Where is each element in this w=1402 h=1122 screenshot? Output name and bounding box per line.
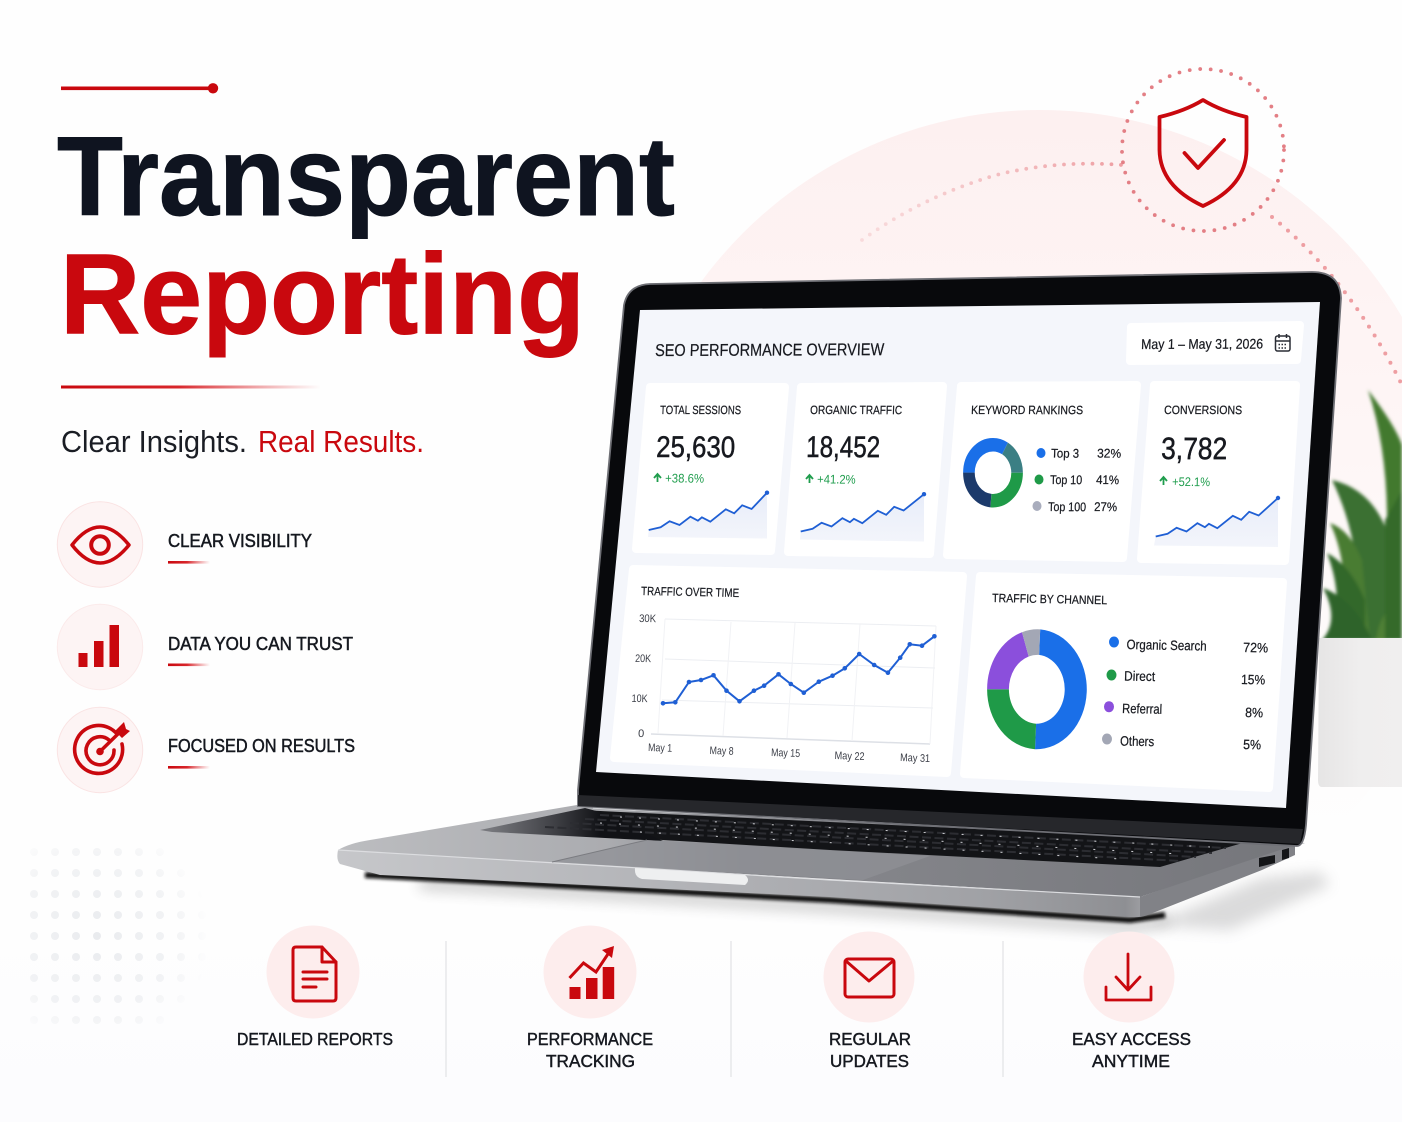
legend: keyword rankings [1032, 447, 1121, 514]
laptop [337, 272, 1341, 930]
bottom feature: performance tracking [527, 926, 653, 1071]
bottom feature: detailed reports: DETAILED REPORTS [237, 1029, 393, 1049]
dashboard title: SEO PERFORMANCE OVERVIEW [655, 340, 884, 360]
card: keyword rankings [947, 385, 1137, 558]
donut chart: traffic by channel [987, 629, 1087, 749]
card: organic traffic [788, 386, 943, 554]
card: organic traffic: ORGANIC TRAFFIC [810, 403, 903, 417]
legend: traffic by channel [1102, 636, 1268, 752]
legend: traffic by channel: Direct [1124, 669, 1156, 684]
icon: bar chart [78, 625, 119, 667]
line chart: May 8 [709, 745, 734, 758]
card: total sessions: TOTAL SESSIONS [660, 403, 741, 417]
card: conversions: CONVERSIONS [1164, 403, 1242, 417]
icon: target [75, 722, 130, 773]
legend: traffic by channel: 5% [1243, 737, 1261, 752]
bottom feature: easy access anytime: EASY ACCESS [1072, 1029, 1191, 1049]
icon: document [293, 947, 336, 1001]
line chart: 20K [635, 653, 652, 665]
title: Reporting [60, 232, 585, 358]
feature: clear visibility [57, 502, 312, 587]
title: Transparent [57, 114, 675, 239]
card: total sessions: 25,630 [656, 431, 736, 464]
bottom feature: performance tracking: PERFORMANCE [527, 1029, 653, 1049]
bottom feature: easy access anytime: ANYTIME [1092, 1051, 1170, 1071]
bottom feature: easy access anytime [1072, 932, 1191, 1071]
ports [1259, 848, 1289, 867]
title [57, 114, 675, 358]
legend: keyword rankings: Top 10 [1050, 473, 1082, 487]
background pink arc [620, 110, 1402, 950]
card: conversions: +52.1% [1172, 475, 1210, 489]
tagline: Real Results. [258, 424, 424, 459]
date picker [1130, 325, 1300, 361]
legend: keyword rankings: Top 100 [1048, 500, 1086, 514]
keyboard [492, 810, 1246, 867]
laptop notch [635, 868, 748, 885]
line chart: 0 [638, 728, 644, 740]
legend: traffic by channel: Organic Search [1126, 637, 1207, 654]
leaves [1322, 390, 1402, 640]
line chart: May 31 [900, 752, 930, 765]
icon: calendar [1276, 334, 1290, 351]
line chart: May 22 [834, 750, 865, 763]
feature: data you can trust [57, 604, 353, 690]
date picker: May 1 – May 31, 2026 [1141, 336, 1264, 352]
feature: data you can trust: DATA YOU CAN TRUST [168, 634, 353, 654]
card: keyword rankings: KEYWORD RANKINGS [971, 403, 1083, 417]
card: total sessions: +38.6% [665, 472, 704, 486]
legend: traffic by channel: Others [1120, 734, 1155, 749]
line chart: 10K [631, 693, 648, 705]
line chart [631, 613, 937, 765]
icon: download [1106, 954, 1151, 1000]
tagline: Clear Insights. [61, 424, 247, 459]
feature: clear visibility: CLEAR VISIBILITY [168, 531, 312, 551]
legend: keyword rankings: 27% [1094, 500, 1117, 514]
card: traffic by channel [964, 576, 1283, 788]
legend: keyword rankings: 32% [1097, 447, 1121, 461]
sparkline [1154, 496, 1280, 547]
bottom feature: regular updates [824, 932, 914, 1071]
legend: traffic by channel: Referral [1122, 701, 1162, 717]
line chart: May 15 [771, 747, 800, 760]
pot [1318, 638, 1402, 787]
feature: focused on results: FOCUSED ON RESULTS [168, 736, 355, 756]
bottom feature: detailed reports [237, 926, 393, 1049]
feature: focused on results [57, 707, 355, 793]
card: traffic over time [614, 569, 963, 773]
legend: traffic by channel: 72% [1243, 640, 1268, 655]
top accent line [61, 83, 218, 94]
icon: envelope [845, 959, 894, 997]
icon: shield with dotted ring [1122, 69, 1284, 231]
legend: traffic by channel: 8% [1245, 705, 1263, 720]
card: traffic by channel: TRAFFIC BY CHANNEL [992, 591, 1108, 607]
legend: keyword rankings: 41% [1096, 473, 1119, 487]
laptop bezel [578, 272, 1341, 846]
bottom feature: regular updates: UPDATES [830, 1051, 909, 1071]
icon: eye [72, 527, 129, 563]
donut chart: keyword rankings [960, 434, 1026, 511]
card: conversions [1141, 385, 1296, 561]
icon: growth chart [570, 946, 614, 999]
sparkline [648, 490, 769, 538]
trackpad [552, 840, 930, 880]
plant [1318, 390, 1402, 787]
card: organic traffic: 18,452 [806, 431, 881, 464]
legend: keyword rankings: Top 3 [1051, 447, 1079, 461]
tagline [61, 424, 424, 459]
card: conversions: 3,782 [1161, 431, 1228, 466]
card: traffic over time: TRAFFIC OVER TIME [641, 584, 739, 600]
legend: traffic by channel: 15% [1241, 672, 1265, 687]
card: organic traffic: +41.2% [817, 473, 856, 487]
bottom feature: performance tracking: TRACKING [546, 1051, 635, 1071]
sparkline [800, 492, 926, 542]
line chart: May 1 [648, 742, 672, 755]
laptop base [337, 805, 1305, 917]
card: total sessions [636, 387, 785, 551]
line chart: 30K [639, 613, 657, 625]
bottom feature: regular updates: REGULAR [829, 1029, 911, 1049]
screen [596, 302, 1320, 808]
